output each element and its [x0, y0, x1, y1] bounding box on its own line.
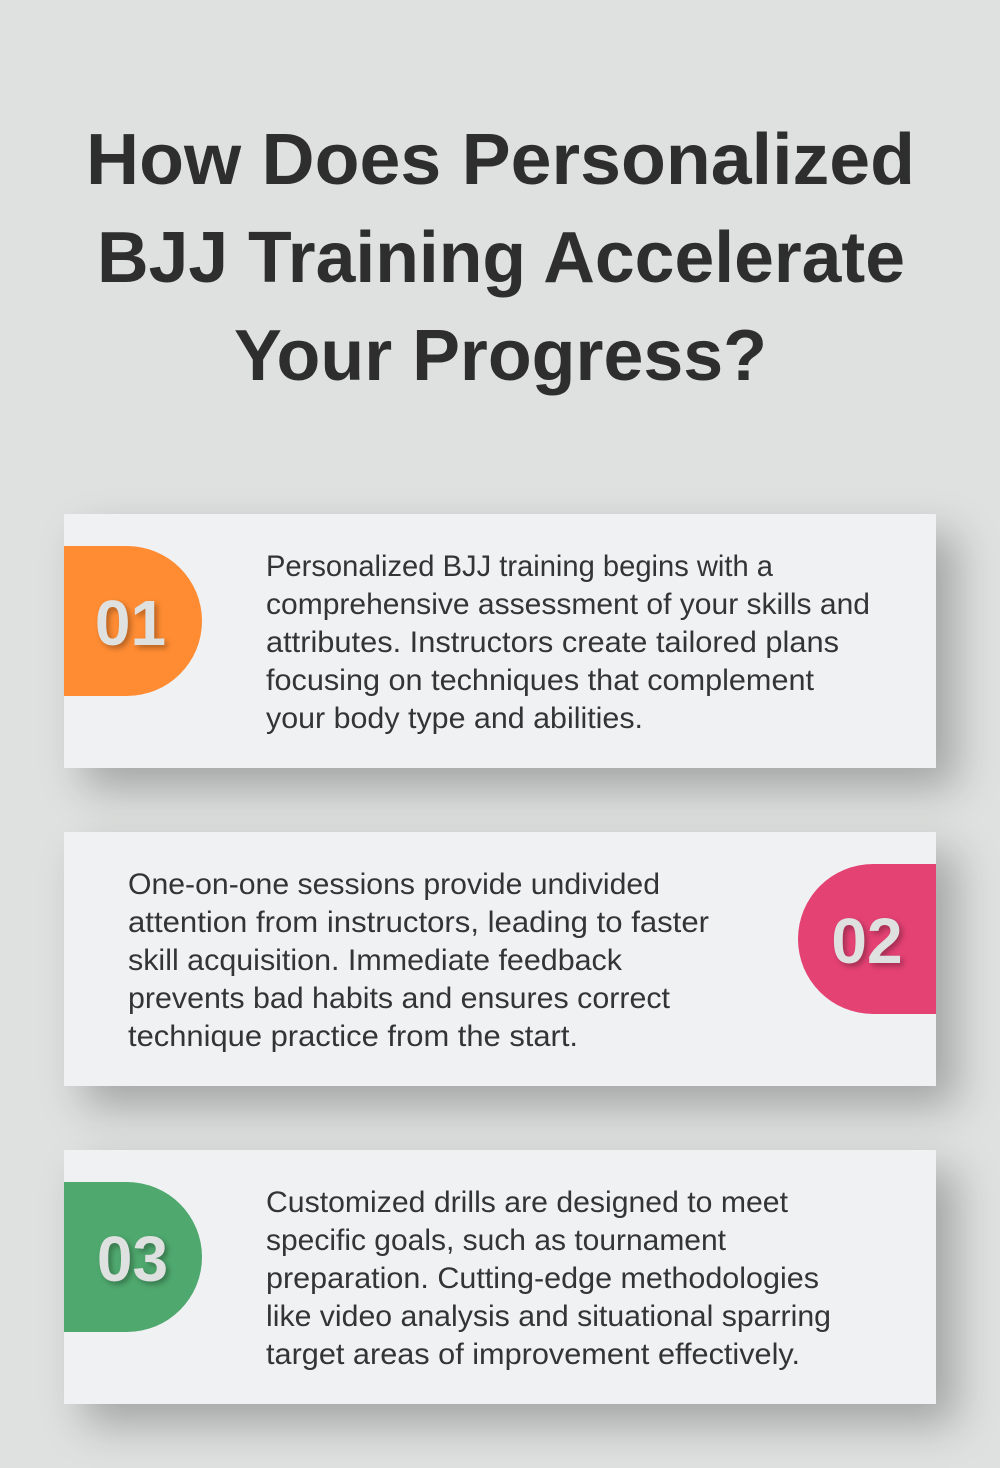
title: How Does Personalized [86, 120, 915, 200]
text block: step 03 description [266, 1186, 831, 1371]
text block: step 01 description: your body type and abilities. [266, 702, 643, 735]
text block: step 02 description: skill acquisition. Immediate feedback [128, 944, 623, 977]
title: Your Progress? [234, 316, 767, 396]
text block: step 02 description [128, 868, 709, 1053]
badge: 02 [798, 864, 936, 1014]
text block: step 01 description [266, 550, 870, 735]
text block: step 01 description: attributes. Instructors create tailored plans [266, 626, 839, 659]
text block: step 02 description: prevents bad habits and ensures correct [128, 982, 671, 1015]
badge: 01 [64, 546, 202, 696]
panel: step 03 [64, 1150, 936, 1404]
badge: 03 [64, 1182, 202, 1332]
title: BJJ Training Accelerate [97, 218, 905, 298]
panel: step 02 [64, 832, 936, 1086]
text block: step 02 description: technique practice from the start. [128, 1020, 578, 1053]
text block: step 03 description: like video analysis and situational sparring [266, 1300, 831, 1333]
text block: step 03 description: preparation. Cutting-edge methodologies [266, 1262, 819, 1295]
title [86, 120, 915, 396]
badge: 01: 01 [95, 587, 166, 659]
badge: 02: 02 [831, 905, 903, 977]
text block: step 03 description: target areas of improvement effectively. [266, 1338, 800, 1371]
text block: step 01 description: Personalized BJJ training begins with a [266, 550, 773, 583]
text block: step 03 description: Customized drills are designed to meet [266, 1186, 789, 1219]
panel: step 01 [64, 514, 936, 768]
text block: step 01 description: focusing on techniques that complement [266, 664, 815, 697]
badge: 03: 03 [97, 1223, 168, 1295]
text block: step 01 description: comprehensive assessment of your skills and [266, 588, 870, 621]
text block: step 02 description: attention from instructors, leading to faster [128, 906, 709, 939]
text block: step 02 description: One-on-one sessions provide undivided [128, 868, 660, 901]
text block: step 03 description: specific goals, such as tournament [266, 1224, 727, 1257]
